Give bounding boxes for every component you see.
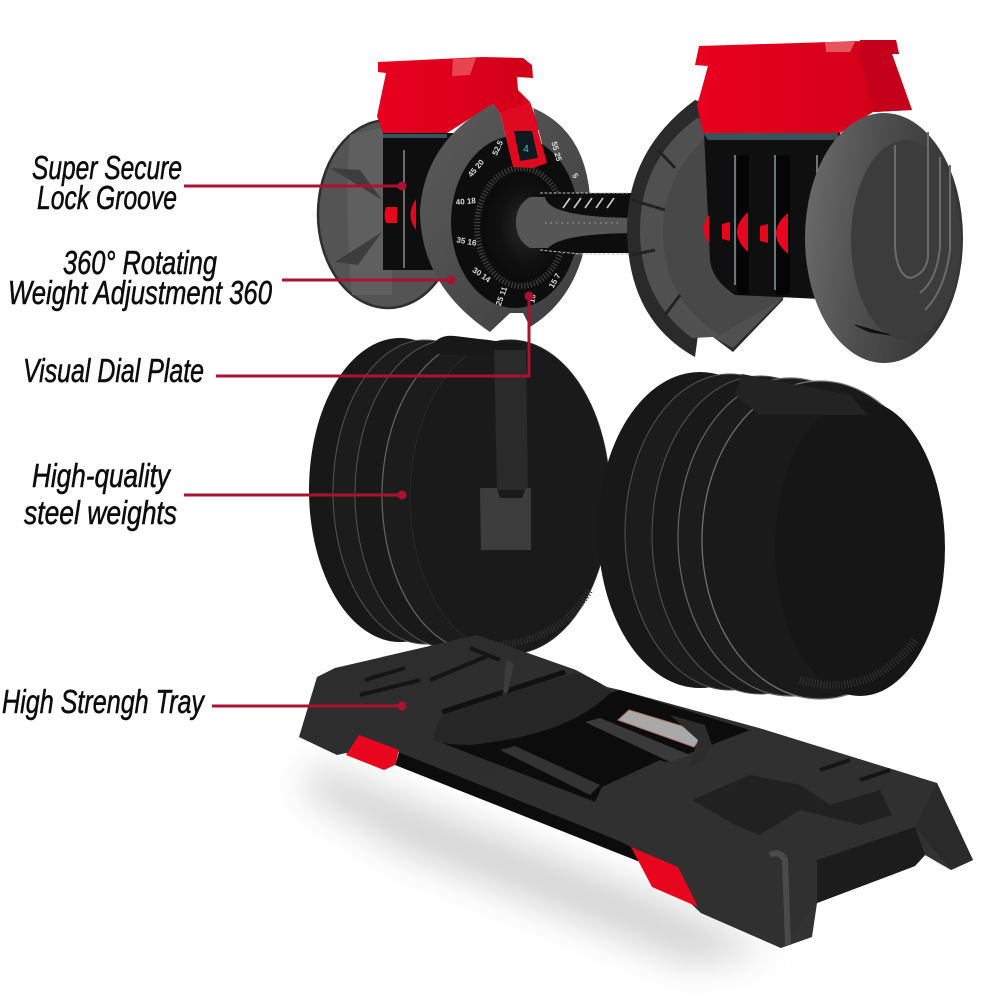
dial weight numbers: 25 11 — [494, 285, 509, 307]
hub — [482, 173, 562, 281]
back plate ring — [640, 118, 790, 348]
red lock bumps — [704, 212, 788, 254]
callout: 360 rotating weight adjustment: Weight Adjustment 360 — [8, 274, 272, 311]
front plate slit — [855, 325, 890, 335]
right weight stack — [598, 372, 945, 699]
slots — [585, 718, 690, 762]
block groove lines — [735, 155, 817, 290]
callout: visual dial plate — [23, 292, 534, 389]
left dumbbell head — [318, 57, 590, 332]
deck dark wavy recess — [692, 775, 892, 835]
dial weight numbers: 5 — [570, 172, 580, 180]
back plate notches — [632, 150, 680, 315]
underside band — [395, 752, 640, 862]
right dumbbell head — [627, 40, 963, 363]
left weight stack — [309, 336, 610, 654]
callout: super secure lock groove — [32, 149, 406, 216]
cap side shade — [860, 40, 912, 112]
callout: high strength tray — [2, 683, 406, 720]
right end opening — [817, 827, 925, 903]
rear locking pin — [670, 715, 712, 775]
arch leg — [915, 783, 973, 870]
saddle slit — [442, 672, 565, 712]
arm mount plate — [480, 488, 531, 550]
callout: 360 rotating weight adjustment — [8, 244, 456, 311]
weight block — [704, 133, 840, 300]
dial weight numbers: 10 — [527, 293, 538, 304]
dial ticks — [477, 168, 565, 286]
window digit: 4 — [523, 144, 529, 155]
callout: super secure lock groove: Super Secure — [32, 149, 182, 186]
block slots — [737, 155, 790, 295]
grip dots — [545, 222, 620, 224]
cap highlight — [825, 42, 855, 52]
top tabs — [432, 336, 530, 355]
back plate inner disc — [663, 124, 783, 335]
cap highlight — [452, 58, 476, 76]
callout: visual dial plate: Visual Dial Plate — [23, 352, 204, 389]
dial weight numbers: 55 25 — [549, 141, 563, 163]
right red foot — [631, 847, 698, 907]
dial plate — [420, 104, 590, 332]
left red foot — [346, 735, 399, 770]
right deck grooves — [820, 760, 890, 780]
dial weight numbers: 45 20 — [466, 157, 486, 179]
red cap — [377, 57, 540, 133]
callout: high-quality steel weights: steel weights — [24, 494, 177, 531]
red latch — [500, 102, 547, 168]
callout: high-quality steel weights: High-quality — [32, 457, 172, 494]
teal strip — [703, 133, 838, 140]
back plate spikes — [330, 168, 382, 265]
metal rack — [618, 710, 705, 747]
callout: high-quality steel weights — [24, 457, 406, 531]
weight block — [383, 133, 463, 270]
segmented back plate — [627, 100, 800, 357]
dumbbell handle — [516, 193, 640, 254]
black grip — [540, 193, 635, 253]
dark arm — [494, 350, 528, 490]
red lock bumps — [384, 199, 416, 230]
dial black face — [451, 136, 579, 308]
block groove line — [403, 150, 405, 268]
tray shadow — [300, 765, 770, 965]
back plate — [318, 120, 458, 308]
saddle pin — [503, 660, 514, 695]
teal strip — [383, 134, 447, 138]
front corner highlight — [770, 853, 788, 945]
U groove — [895, 132, 950, 310]
grip slashes — [563, 198, 614, 208]
front plate — [805, 113, 963, 363]
callout: super secure lock groove: Lock Groove — [37, 179, 177, 216]
center recess — [442, 690, 750, 803]
front plate inner — [851, 140, 961, 340]
top tabs — [735, 374, 868, 415]
tray body — [299, 635, 973, 948]
callout: 360 rotating weight adjustment: 360° Rotating — [63, 244, 217, 281]
right deck — [585, 730, 937, 948]
grey grip body — [516, 197, 640, 248]
dial weight numbers: 35 16 — [456, 235, 478, 248]
callout: high strength tray: High Strengh Tray — [2, 683, 206, 720]
dial weight numbers: 52.5 — [490, 138, 505, 157]
red cap — [695, 40, 912, 133]
left deck grooves — [360, 648, 500, 695]
back plate column — [347, 125, 392, 295]
disc tick ring — [800, 640, 915, 685]
discs back to front — [598, 372, 802, 688]
dial weight numbers: 30 14 — [471, 266, 493, 285]
saddle — [433, 673, 611, 745]
discs back to front — [309, 338, 491, 642]
dial weight numbers — [455, 138, 580, 307]
high strength tray — [299, 635, 973, 948]
grip stitching — [540, 193, 628, 254]
dial weight numbers: 40 18 — [455, 196, 477, 207]
disc tick ring — [500, 590, 590, 645]
dial weight numbers: 15 7 — [547, 271, 563, 290]
latch window — [514, 131, 538, 161]
